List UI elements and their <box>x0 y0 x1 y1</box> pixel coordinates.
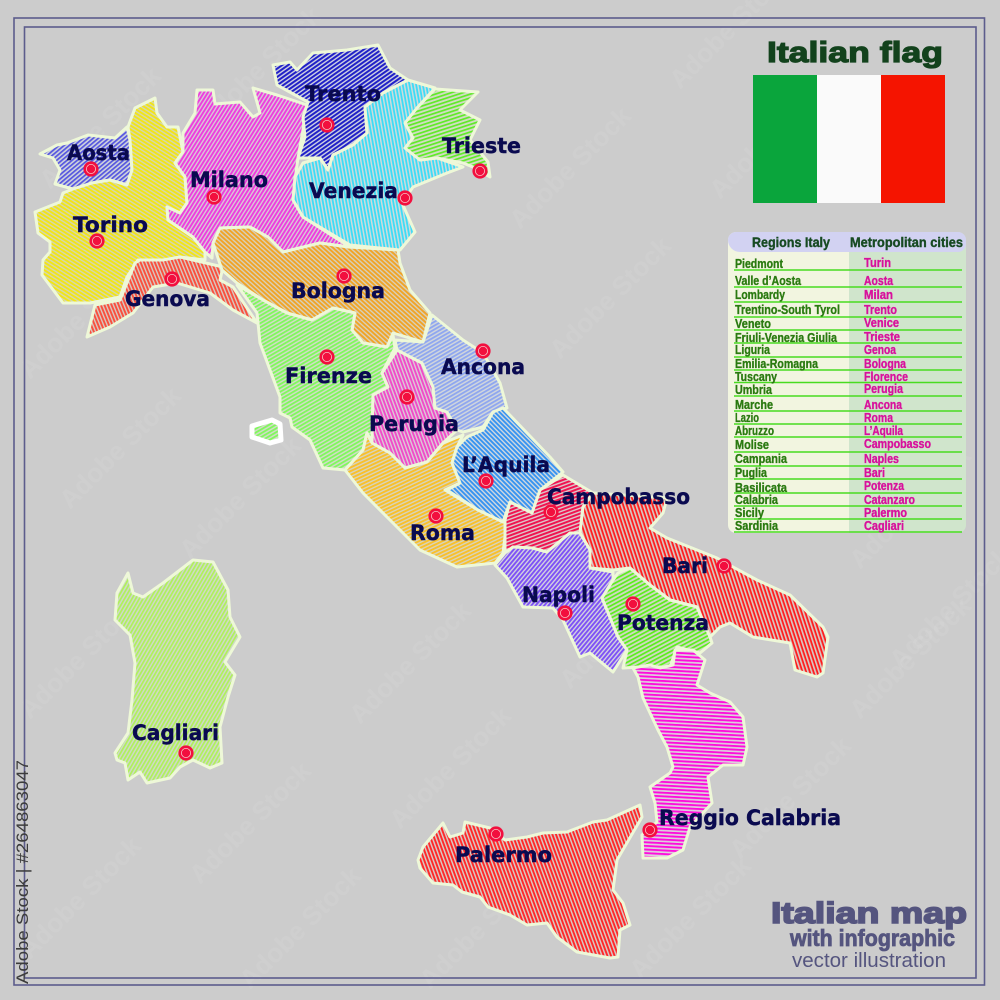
column: metropolitan cities: Palermo <box>864 505 907 520</box>
region: Lazio <box>345 433 507 567</box>
table header: Regions Italy <box>752 234 830 250</box>
city labels: Trieste <box>442 134 521 158</box>
region: Emilia-Romagna <box>213 227 430 347</box>
column: regions: Veneto <box>735 316 771 331</box>
region: Abruzzo <box>447 408 563 522</box>
column: regions <box>735 256 840 533</box>
column: metropolitan cities: Roma <box>864 410 894 425</box>
text: Adobe Stock <box>13 830 147 964</box>
column: regions: Piedmont <box>735 256 784 271</box>
column: regions: Emilia-Romagna <box>735 356 819 371</box>
city labels: Campobasso <box>547 485 690 509</box>
text: Adobe Stock <box>173 430 307 564</box>
region: Molise <box>505 475 593 553</box>
city labels: Potenza <box>617 611 709 635</box>
city labels: Roma <box>410 521 475 545</box>
region: Sicily <box>418 805 642 958</box>
column: regions: Puglia <box>735 465 768 480</box>
text: Adobe Stock <box>233 860 367 994</box>
column: regions: Valle d’Aosta <box>735 273 802 288</box>
column: regions: Campania <box>735 451 788 466</box>
bottom caption <box>771 897 967 972</box>
column: metropolitan cities: Trento <box>864 302 897 317</box>
regions and cities table <box>728 232 966 533</box>
region: Friuli-Venezia Giulia <box>405 89 490 177</box>
text: Adobe Stock <box>383 700 517 834</box>
bottom caption: vector illustration <box>792 950 946 972</box>
column: regions: Abruzzo <box>735 423 774 438</box>
city labels: Reggio Calabria <box>659 806 841 830</box>
column: regions: Umbria <box>735 382 773 397</box>
column: regions: Molise <box>735 437 769 452</box>
region: Trentino-South Tyrol <box>273 45 408 170</box>
bottom caption: Italian map <box>771 897 967 930</box>
column: regions: Liguria <box>735 342 771 357</box>
column: metropolitan cities: Potenza <box>864 478 905 493</box>
text: Adobe Stock <box>343 595 477 729</box>
column: metropolitan cities: Venice <box>864 315 899 330</box>
table header: Metropolitan cities <box>850 234 963 250</box>
region: Marche <box>395 315 507 432</box>
text: Adobe Stock <box>183 755 317 889</box>
column: metropolitan cities: Perugia <box>864 381 904 396</box>
city labels: Genova <box>125 287 210 311</box>
column: metropolitan cities: Naples <box>864 451 899 466</box>
city labels: Firenze <box>285 364 372 388</box>
city labels: Venezia <box>309 179 398 203</box>
city labels: Aosta <box>67 141 130 165</box>
city labels: Bologna <box>291 279 385 303</box>
text: Adobe Stock <box>623 850 757 984</box>
text: Adobe Stock <box>193 0 327 134</box>
column: metropolitan cities: Campobasso <box>864 436 931 451</box>
column: regions: Tuscany <box>735 369 778 384</box>
city labels: Ancona <box>441 355 525 379</box>
column: regions: Trentino-South Tyrol <box>735 302 840 317</box>
text: Adobe Stock <box>503 100 637 234</box>
city labels: Bari <box>662 554 708 578</box>
text: Adobe Stock <box>13 590 147 724</box>
text: Adobe Stock <box>703 70 837 204</box>
column: metropolitan cities: Turin <box>864 255 891 270</box>
column: metropolitan cities: L’Aquila <box>864 423 904 438</box>
column: metropolitan cities: Bari <box>864 465 885 480</box>
region: Tuscany <box>237 285 395 470</box>
region: Sardinia <box>115 560 240 783</box>
text: Adobe Stock <box>33 60 167 194</box>
map of Italian regions <box>35 45 828 958</box>
text: Adobe Stock <box>723 730 857 864</box>
column: metropolitan cities: Ancona <box>864 397 903 412</box>
column: regions: Sicily <box>735 505 765 520</box>
bottom caption: with infographic <box>789 925 955 951</box>
city labels <box>67 82 841 867</box>
city labels: Palermo <box>455 843 552 867</box>
region: Veneto <box>293 80 463 250</box>
city labels: Cagliari <box>132 721 219 745</box>
column: regions: Lazio <box>735 410 759 425</box>
region: Calabria <box>633 650 747 858</box>
region: Liguria <box>87 257 257 337</box>
region: Lombardy <box>167 88 350 258</box>
column: regions: Sardinia <box>735 518 779 533</box>
text: Adobe Stock <box>843 440 977 574</box>
column: metropolitan cities: Milan <box>864 287 893 302</box>
column: regions: Calabria <box>735 492 779 507</box>
region: Campania <box>495 533 627 672</box>
city markers <box>83 117 732 842</box>
city labels: Perugia <box>369 412 459 436</box>
region: Piedmont <box>35 98 205 303</box>
text: Adobe Stock <box>553 560 687 694</box>
text: Adobe Stock <box>843 590 977 724</box>
region: Elba island <box>252 420 281 443</box>
flag heading: Italian flag <box>767 37 943 69</box>
column: regions: Lombardy <box>735 287 786 302</box>
column: metropolitan cities <box>864 255 931 533</box>
column: metropolitan cities: Bologna <box>864 356 907 371</box>
column: metropolitan cities: Florence <box>864 369 908 384</box>
city labels: Torino <box>73 213 148 237</box>
city labels: L’Aquila <box>462 453 550 477</box>
table header <box>728 232 966 252</box>
region: Valle d'Aosta <box>40 127 132 189</box>
column: metropolitan cities: Catanzaro <box>864 492 915 507</box>
column: metropolitan cities: Genoa <box>864 342 897 357</box>
column: metropolitan cities: Aosta <box>864 273 894 288</box>
text: Adobe Stock <box>543 230 677 364</box>
column: regions: Marche <box>735 397 773 412</box>
vertical stock credit: Adobe Stock | #264863047 <box>13 760 32 984</box>
Italian flag <box>753 75 945 203</box>
text: Adobe Stock <box>53 380 187 514</box>
city labels: Milano <box>190 168 268 192</box>
column: regions: Friuli-Venezia Giulia <box>735 330 838 345</box>
region: Puglia <box>580 493 828 677</box>
column: metropolitan cities: Trieste <box>864 329 900 344</box>
city labels: Trento <box>305 82 381 106</box>
text: Adobe Stock <box>413 860 547 994</box>
region: Umbria <box>372 350 457 468</box>
region: Basilicata <box>602 568 712 668</box>
city labels: Napoli <box>522 583 595 607</box>
column: regions: Basilicata <box>735 480 788 495</box>
text: Adobe Stock <box>13 250 147 384</box>
column: metropolitan cities: Cagliari <box>864 518 904 533</box>
